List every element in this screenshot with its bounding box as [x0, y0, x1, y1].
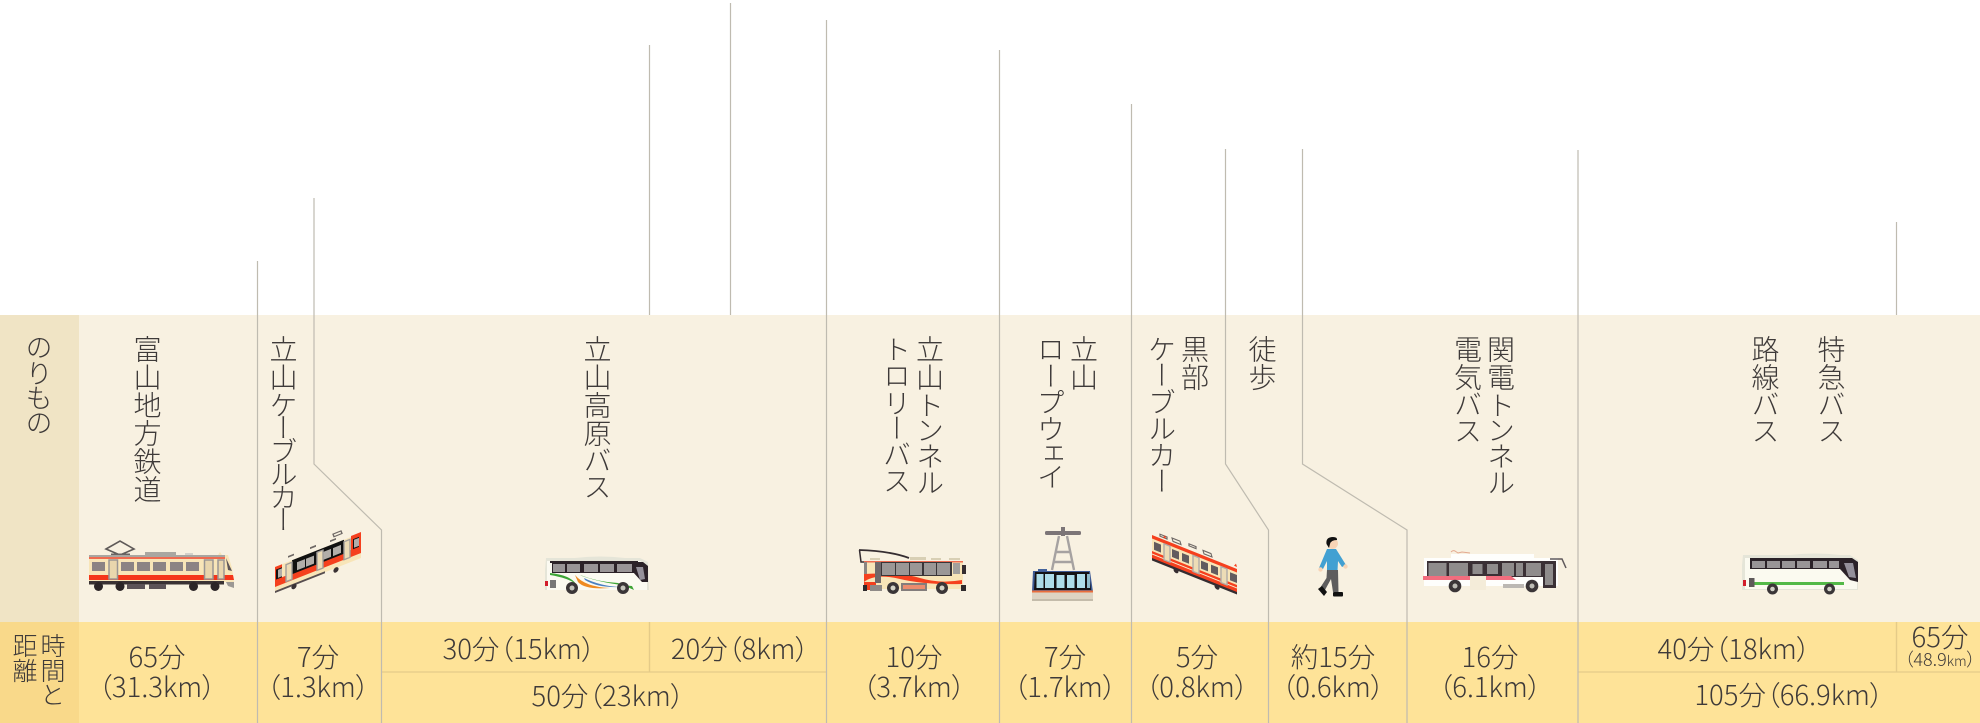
value: 立山トンネルトロリーバス time and distance: [862, 635, 966, 705]
icon: Tateyama ropeway: [1032, 527, 1093, 601]
label: 立山ロープウェイ: 立山: [1064, 335, 1104, 391]
panel: vehicle band: [79, 315, 1980, 622]
value: 黒部ケーブルカー time and distance: （0.8km）: [1146, 665, 1248, 705]
heading: のりもの: のりもの: [20, 335, 58, 436]
value: 30分 15km: 30分（15km）: [442, 627, 596, 667]
value: 関電トンネル電気バス time and distance: [1438, 635, 1542, 705]
label: 黒部ケーブルカー: ケーブルカー: [1142, 335, 1182, 494]
label: 徒歩: 徒歩: [1242, 335, 1282, 391]
value: 富山地方鉄道 time and distance: [98, 635, 216, 705]
label: 立山トンネルトロリーバス: トロリーバス: [877, 335, 917, 493]
value: 黒部ケーブルカー time and distance: [1146, 635, 1248, 705]
label: 特急バス 路線バス: 路線バス: [1746, 335, 1786, 443]
value: 65分 48.9km: 65分: [1912, 615, 1968, 655]
label: 特急バス 路線バス: [1746, 335, 1852, 443]
value: 黒部ケーブルカー time and distance: 5分: [1176, 635, 1218, 675]
label: 富山地方鉄道: 富山地方鉄道: [128, 335, 168, 503]
label: 立山トンネルトロリーバス: 立山トンネル: [910, 335, 950, 495]
panel: time and distance header cell: [0, 622, 79, 723]
label: 立山高原バス: 立山高原バス: [578, 335, 618, 499]
value: 関電トンネル電気バス time and distance: （6.1km）: [1438, 665, 1542, 705]
icon: express route bus: [1742, 554, 1858, 594]
icon: Toyama Chiho Railway train: [89, 541, 234, 591]
value: 40分 18km: 40分（18km）: [1657, 627, 1811, 667]
value: 立山ケーブルカー time and distance: （1.3km）: [266, 665, 370, 705]
panel: time and distance band: [79, 622, 1980, 723]
label: 黒部ケーブルカー: 黒部: [1175, 335, 1215, 391]
value: 立山トンネルトロリーバス time and distance: （3.7km）: [862, 665, 966, 705]
value: 立山トンネルトロリーバス time and distance: 10分: [886, 635, 942, 675]
value: 関電トンネル電気バス time and distance: 16分: [1462, 635, 1518, 675]
label: 関電トンネル電気バス: [1448, 335, 1521, 495]
label: 関電トンネル電気バス: 電気バス: [1448, 335, 1488, 443]
value: 立山ロープウェイ time and distance: （1.7km）: [1014, 665, 1116, 705]
value: 徒歩 time and distance: （0.6km）: [1282, 665, 1384, 705]
value: 徒歩 time and distance: 約15分: [1291, 635, 1375, 675]
value: 20分 8km: 20分（8km）: [671, 627, 809, 667]
label: 黒部ケーブルカー: [1142, 335, 1215, 494]
value: 立山ケーブルカー time and distance: [266, 635, 370, 705]
value: 富山地方鉄道 time and distance: 65分: [129, 635, 185, 675]
icon: Tateyama cable car: [275, 523, 361, 597]
label: 立山トンネルトロリーバス: [877, 335, 950, 495]
value: 立山ケーブルカー time and distance: 7分: [297, 635, 339, 675]
value: 65分 48.9km: [1904, 615, 1976, 672]
label: 特急バス 路線バス: 特急バス: [1812, 335, 1852, 443]
label: 立山ロープウェイ: [1031, 335, 1104, 489]
value: 立山ロープウェイ time and distance: [1014, 635, 1116, 705]
icon: Tateyama Kogen bus: [545, 556, 649, 594]
label: 立山ケーブルカー: 立山 ケーブルカー: [264, 335, 304, 529]
heading: 時間と距離: 時間と: [35, 633, 71, 707]
panel: vehicle header cell: [0, 315, 79, 622]
value: 富山地方鉄道 time and distance: （31.3km）: [98, 665, 216, 705]
value: 105分 66.9km: 105分（66.9km）: [1694, 673, 1884, 713]
icon: Kanden Tunnel electric bus: [1423, 551, 1566, 592]
icon: Kurobe cable car: [1152, 529, 1237, 598]
icon: walking person: [1318, 537, 1348, 596]
label: 関電トンネル電気バス: 関電トンネル: [1481, 335, 1521, 495]
value: 立山ロープウェイ time and distance: 7分: [1044, 635, 1086, 675]
heading: 時間と距離: [7, 633, 71, 707]
heading: 時間と距離: 距離: [7, 633, 43, 683]
icon: Tateyama Tunnel trolley bus: [859, 550, 966, 594]
value: 徒歩 time and distance: [1282, 635, 1384, 705]
value: 50分 23km: 50分（23km）: [531, 674, 685, 714]
label: 立山ロープウェイ: ロープウェイ: [1031, 335, 1071, 489]
value: 65分 48.9km: （48.9km）: [1904, 646, 1976, 672]
